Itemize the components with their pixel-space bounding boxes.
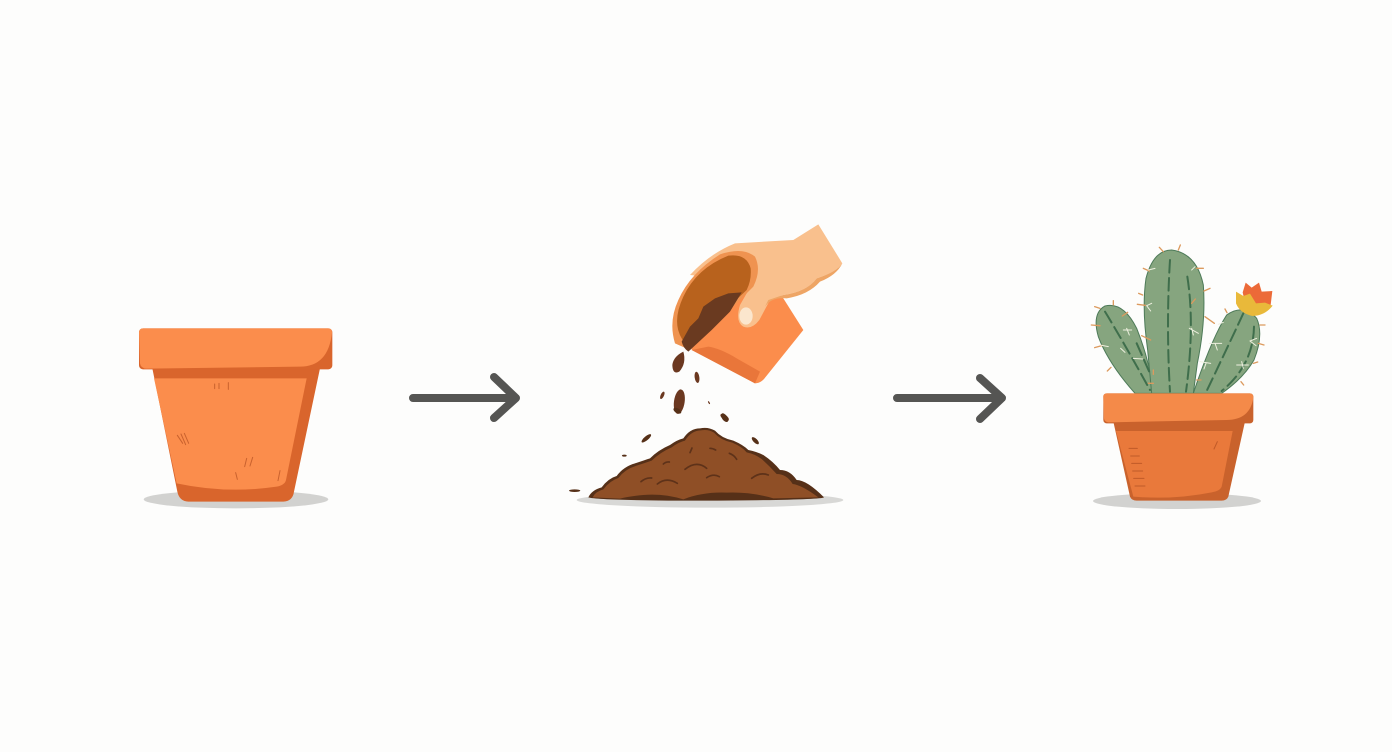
spines (1091, 245, 1265, 385)
cactus (1091, 245, 1273, 393)
arrow: step one to step two (413, 377, 516, 418)
soil in pot (682, 292, 742, 352)
arrow: step two to step three (897, 378, 1002, 419)
icon: hand tipping pot of soil (659, 224, 842, 422)
pot (1103, 393, 1253, 501)
icon: soil pile with shadow (569, 406, 843, 508)
central column (1144, 250, 1204, 393)
ribs (1105, 260, 1254, 392)
right arm (behind flower) (1193, 310, 1260, 393)
pot rim and interior (672, 251, 758, 350)
pot shadow (1093, 493, 1261, 509)
icon: empty terracotta pot (139, 328, 332, 508)
flower (1243, 283, 1272, 310)
falling soil (659, 352, 730, 422)
hand (690, 224, 842, 327)
icon: potted cactus with flower (1091, 245, 1273, 509)
left arm (1096, 305, 1153, 393)
tilted pot body (690, 258, 803, 383)
